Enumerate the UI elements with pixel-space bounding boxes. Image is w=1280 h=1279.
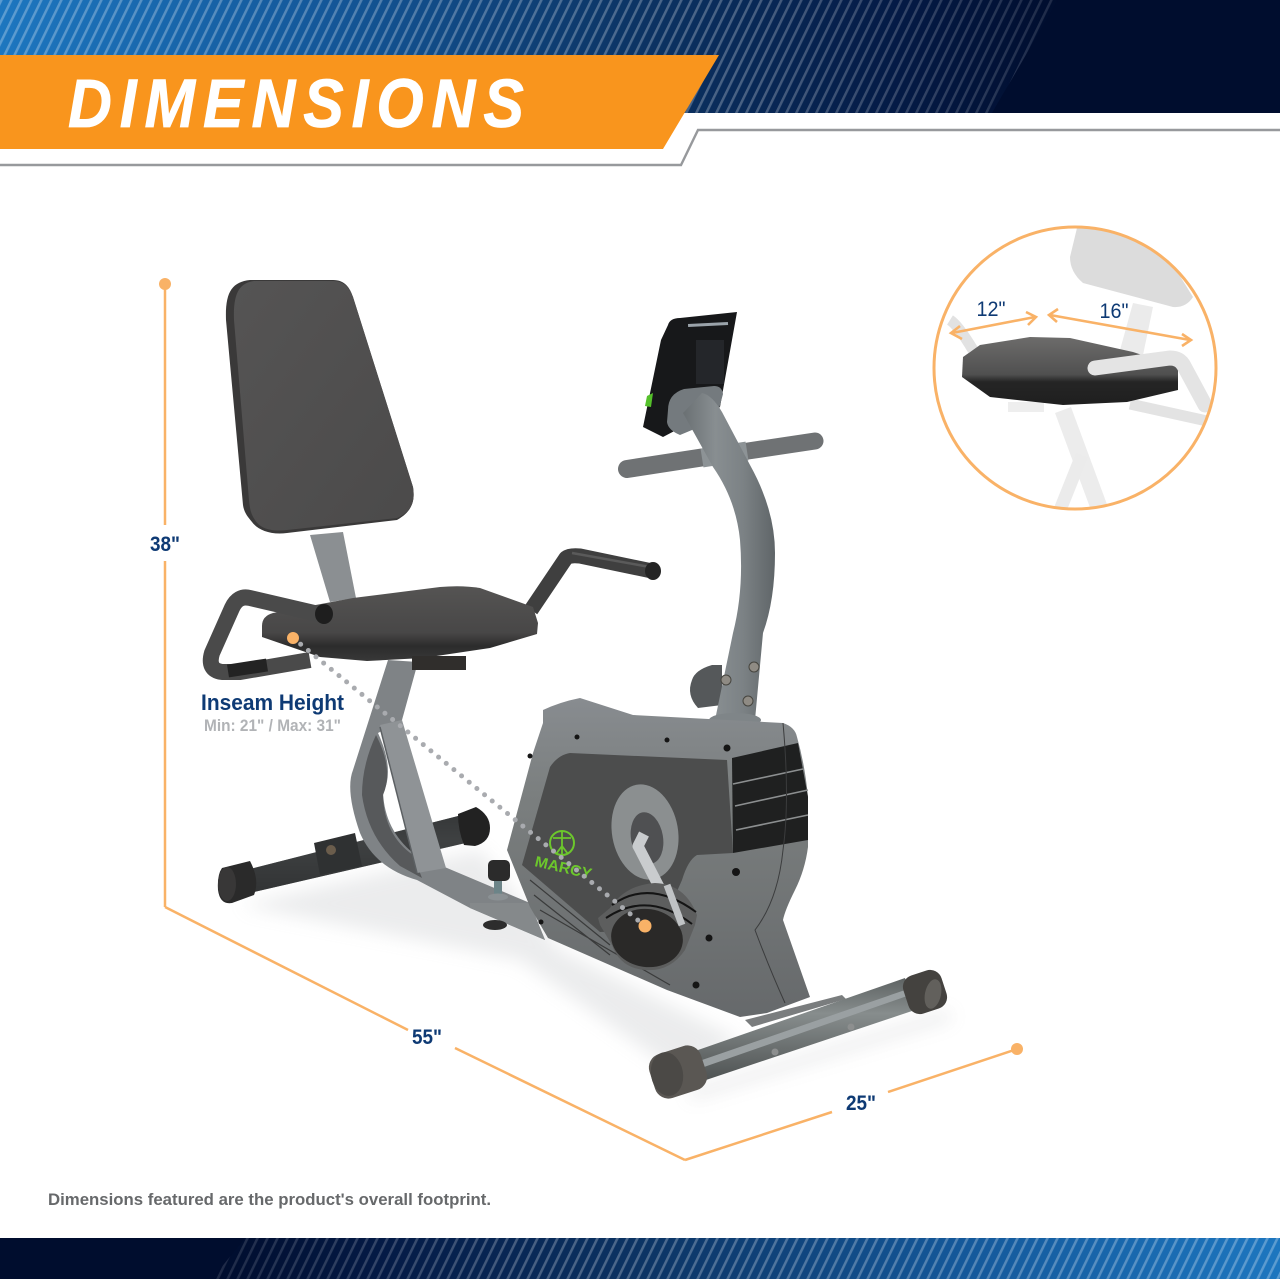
- console: [643, 312, 737, 437]
- left end cap: [645, 1042, 711, 1102]
- housing fasteners: [528, 734, 740, 988]
- logo: MARCY: [533, 853, 593, 883]
- right end cap: [900, 967, 950, 1017]
- seat cushion: [962, 337, 1178, 405]
- circle outline: [934, 227, 1216, 509]
- height label: 38": [150, 533, 180, 556]
- title: DIMENSIONS: [68, 64, 524, 142]
- inseam dotted line: [293, 638, 645, 926]
- inseam dot: pedal: [638, 920, 652, 932]
- header divider line: [0, 130, 1280, 165]
- 16 inch label: 16": [1100, 300, 1128, 323]
- handlebar: [627, 441, 815, 469]
- header banner: [0, 0, 1280, 113]
- front stabilizer: [645, 967, 950, 1102]
- inseam label: [201, 690, 345, 735]
- width label: 25": [846, 1092, 876, 1115]
- inset: seat dimensions: [934, 227, 1216, 510]
- footnote: Dimensions featured are the product's overall footprint.: [48, 1190, 491, 1209]
- seat back post: [310, 532, 356, 602]
- inseam dot: seat: [287, 632, 299, 644]
- inseam range: Min: 21" / Max: 31": [204, 717, 341, 735]
- dimension line: width: [685, 1043, 1023, 1160]
- pedal: [598, 883, 697, 972]
- adjustment knob: [488, 860, 510, 900]
- backrest: [226, 280, 414, 533]
- seat post frame: [350, 660, 545, 940]
- dimension line: height: [150, 278, 180, 907]
- resistance knob: [690, 665, 722, 708]
- flywheel housing: [507, 698, 810, 1017]
- housing lower lines: [530, 880, 670, 985]
- left armrest: [211, 597, 333, 672]
- length label: 55": [412, 1026, 442, 1049]
- faded armrest: [1095, 358, 1205, 405]
- right armrest: [531, 553, 661, 610]
- 12 inch arrow: [951, 312, 1036, 339]
- faded bike parts: [950, 228, 1207, 510]
- 12 inch label: 12": [976, 298, 1006, 321]
- exercise bike: [211, 280, 950, 1102]
- seat: [262, 586, 538, 670]
- housing seam: [755, 723, 786, 1003]
- rear stabilizer: [218, 807, 490, 903]
- logo: [533, 831, 593, 883]
- black grille: [732, 743, 808, 853]
- console mount plate: [667, 386, 723, 435]
- crank disc: [604, 779, 686, 885]
- inseam label: Inseam Height: [201, 690, 345, 715]
- dimension line: length: [165, 907, 685, 1160]
- side panel: [522, 753, 733, 932]
- console neck tube: [683, 393, 775, 727]
- footer band: [0, 1238, 1280, 1279]
- floor shadows: [240, 850, 950, 1095]
- 16 inch arrow: [1049, 309, 1191, 346]
- crank arm: [638, 834, 672, 912]
- title ribbon: [0, 55, 719, 149]
